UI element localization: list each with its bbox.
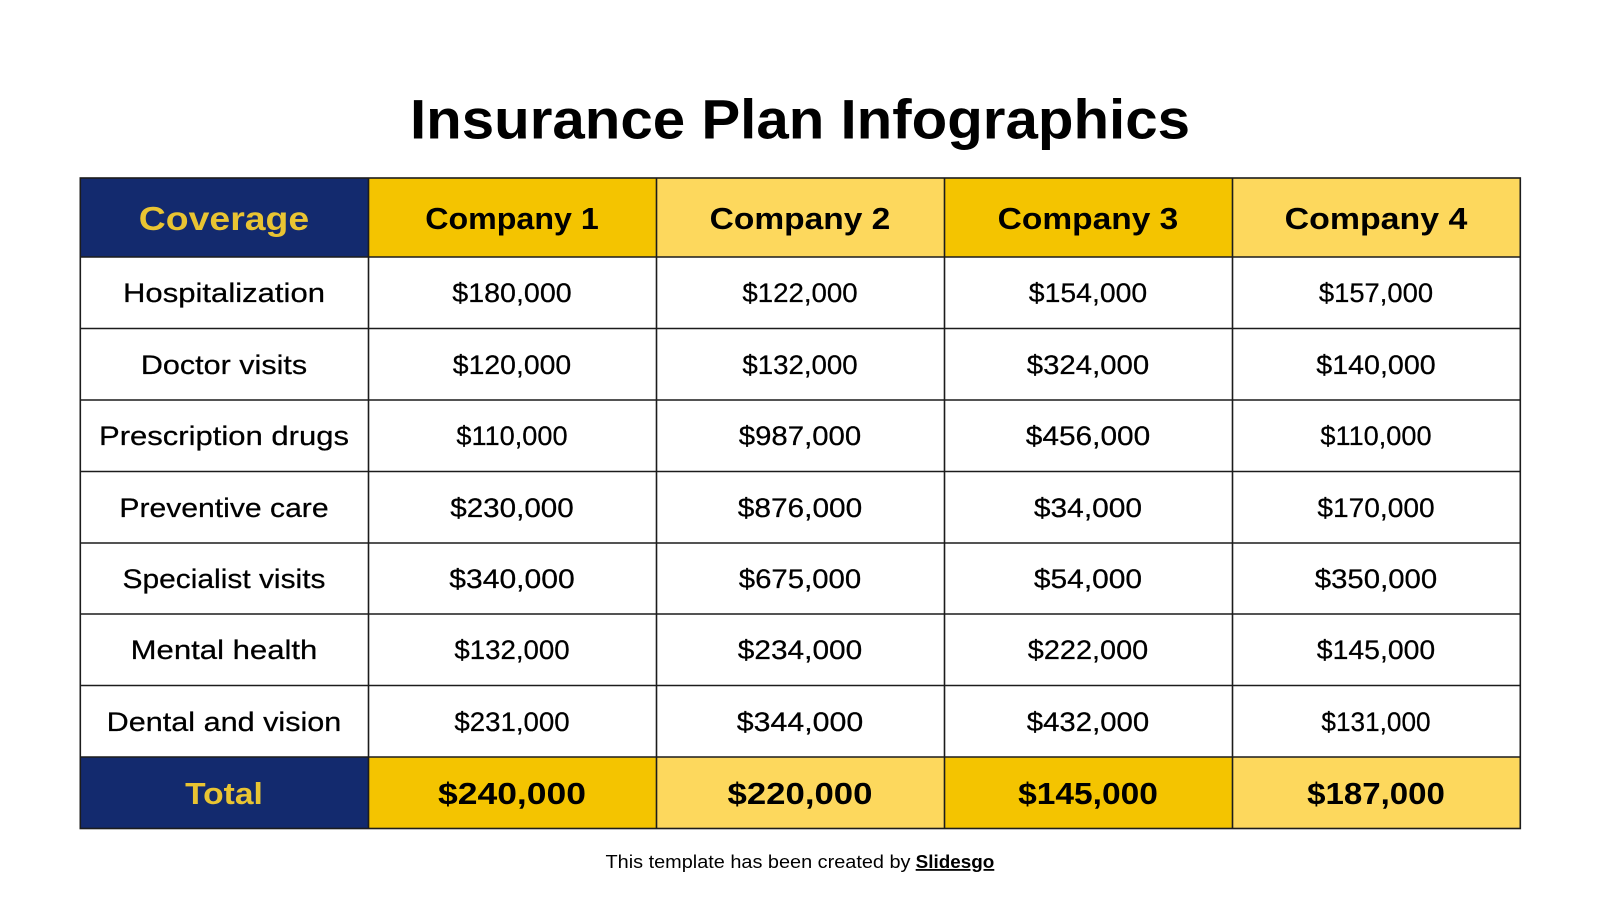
header cell: company 4 [1232, 178, 1520, 257]
row: prescription drugs: $110,000 [456, 421, 568, 451]
row: hospitalization: $180,000 [452, 278, 572, 308]
row: hospitalization: $122,000 [742, 278, 858, 308]
row: hospitalization: $154,000 [1029, 278, 1147, 308]
row: preventive care: $876,000 [738, 493, 862, 523]
row: prescription drugs: $456,000 [1026, 421, 1150, 451]
row: preventive care [119, 493, 1435, 523]
row: preventive care: $230,000 [450, 493, 574, 523]
row: doctor visits: Doctor visits [141, 350, 307, 380]
row: dental and vision: $432,000 [1027, 707, 1149, 737]
row: dental and vision: $344,000 [737, 707, 863, 737]
total: company 3 [944, 757, 1232, 828]
row: mental health: Mental health [131, 635, 317, 665]
header cell: company 3 [944, 178, 1232, 257]
row: mental health [131, 635, 1435, 665]
row: dental and vision: $131,000 [1321, 707, 1431, 737]
header cell: coverage [80, 178, 368, 257]
total: company 2: $220,000 [728, 776, 872, 811]
header cell: company 1 [368, 178, 656, 257]
row: specialist visits: $54,000 [1034, 564, 1142, 594]
row: specialist visits: Specialist visits [122, 564, 326, 594]
header cell: company 1: Company 1 [425, 201, 599, 236]
total: company 3: $145,000 [1018, 776, 1158, 811]
header cell: company 4: Company 4 [1285, 201, 1468, 236]
row: doctor visits: $324,000 [1027, 350, 1149, 380]
row: preventive care: $34,000 [1034, 493, 1142, 523]
row: specialist visits: $340,000 [449, 564, 575, 594]
row: mental health: $145,000 [1317, 635, 1435, 665]
row: prescription drugs: $110,000 [1320, 421, 1432, 451]
footer credit: Slidesgo [916, 852, 994, 872]
row: doctor visits: $132,000 [742, 350, 858, 380]
row: mental health: $132,000 [454, 635, 570, 665]
total: company 4 [1232, 757, 1520, 828]
row: preventive care: $170,000 [1317, 493, 1435, 523]
row: doctor visits: $140,000 [1316, 350, 1436, 380]
header cell: coverage: Coverage [139, 200, 309, 237]
total: company 4: $187,000 [1307, 776, 1445, 811]
row: prescription drugs: $987,000 [739, 421, 861, 451]
total: company 2 [656, 757, 944, 828]
row: hospitalization: $157,000 [1319, 278, 1433, 308]
row: mental health: $234,000 [738, 635, 862, 665]
header cell: company 2 [656, 178, 944, 257]
row: specialist visits [122, 564, 1437, 594]
row: doctor visits: $120,000 [453, 350, 571, 380]
row: doctor visits [141, 350, 1436, 380]
table [80, 178, 1520, 828]
row: dental and vision: Dental and vision [107, 707, 341, 737]
row: mental health: $222,000 [1028, 635, 1148, 665]
header row [80, 178, 1520, 257]
total label [80, 757, 368, 828]
total row [80, 757, 1520, 828]
total: company 1: $240,000 [438, 776, 586, 811]
row: hospitalization: Hospitalization [123, 278, 325, 308]
row: prescription drugs [99, 421, 1432, 451]
title: Insurance Plan Infographics [410, 88, 1190, 150]
row: specialist visits: $675,000 [739, 564, 861, 594]
row: preventive care: Preventive care [119, 493, 329, 523]
row: hospitalization [123, 278, 1433, 308]
footer credit: This template has been created by [606, 852, 910, 872]
row: specialist visits: $350,000 [1315, 564, 1437, 594]
total label: Total [185, 776, 263, 811]
row: dental and vision [107, 707, 1431, 737]
header cell: company 3: Company 3 [998, 201, 1178, 236]
total: company 1 [368, 757, 656, 828]
row: dental and vision: $231,000 [454, 707, 570, 737]
row: prescription drugs: Prescription drugs [99, 421, 349, 451]
header cell: company 2: Company 2 [710, 201, 890, 236]
